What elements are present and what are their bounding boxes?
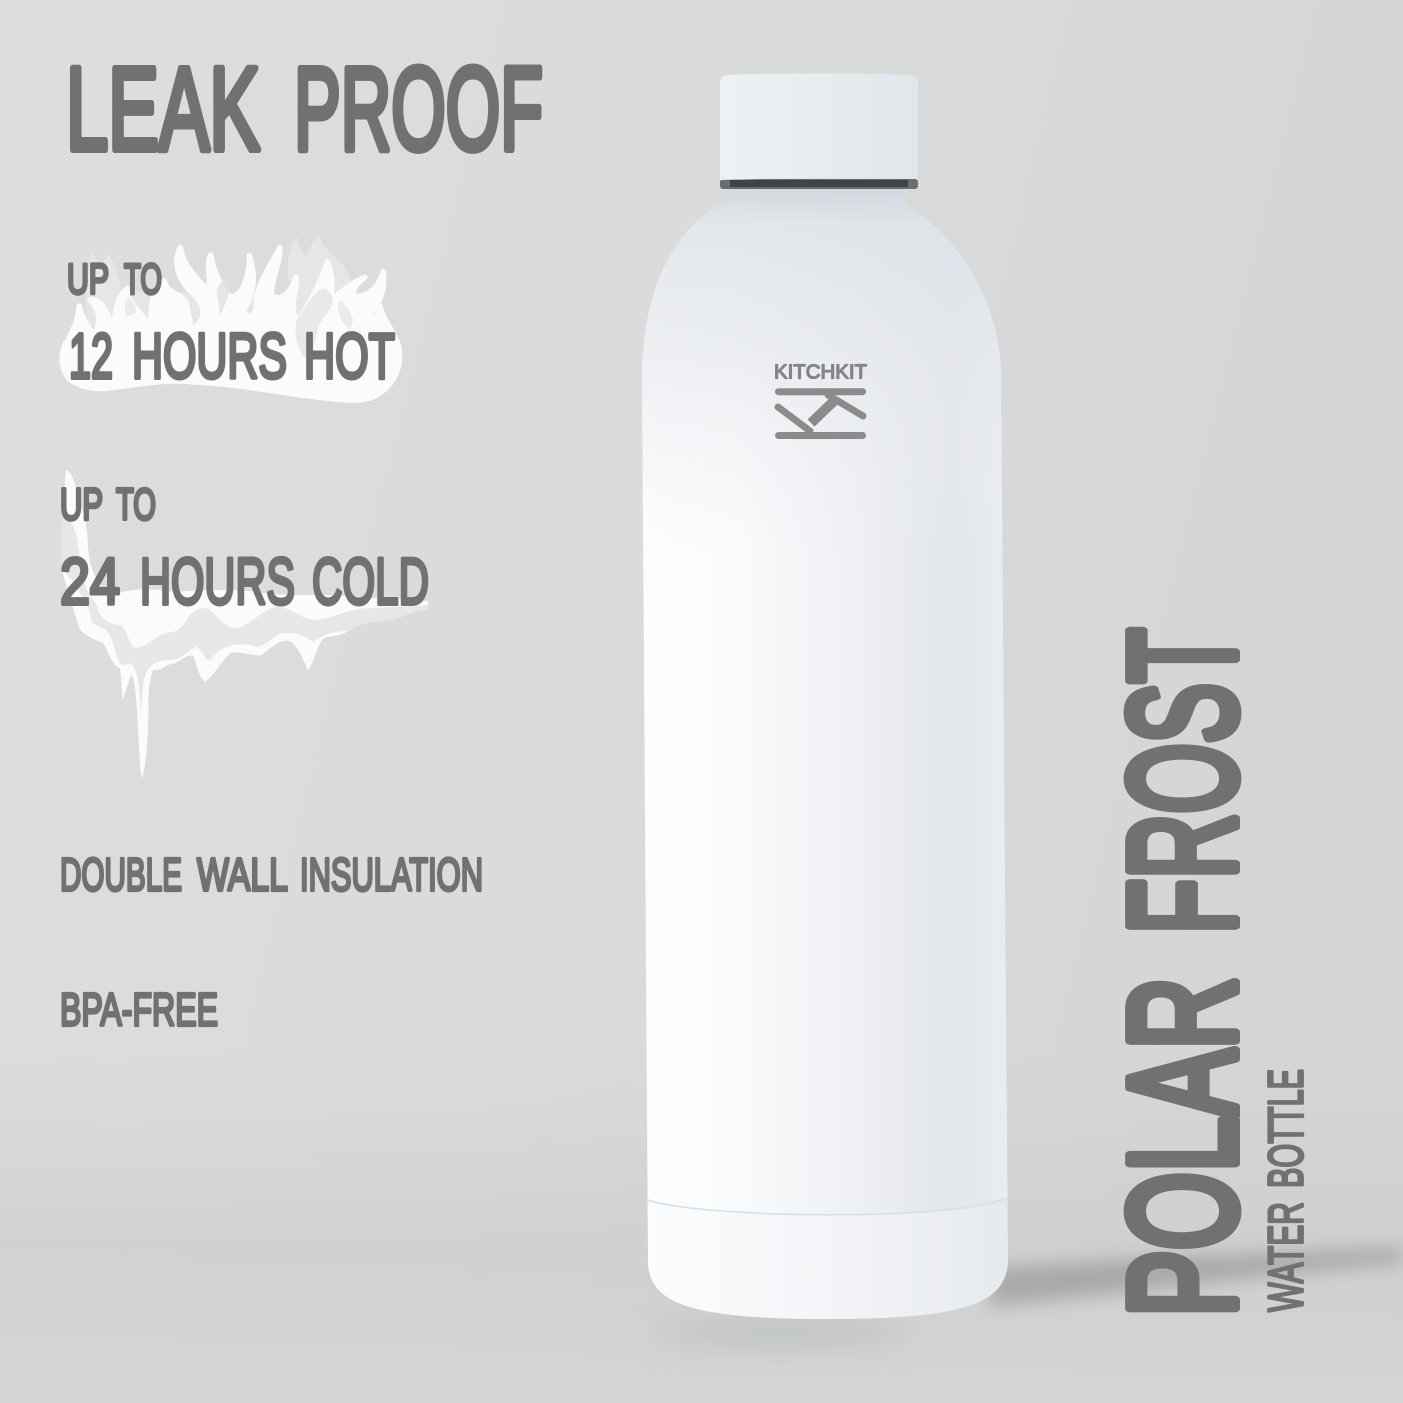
text: up to, cold: UP bbox=[60, 480, 103, 530]
bottle bbox=[642, 74, 1008, 1319]
text: 12 hours hot: HOT bbox=[304, 320, 395, 392]
text: double wall insulation: DOUBLE bbox=[60, 848, 182, 900]
icon: frost drip bbox=[61, 470, 428, 778]
text: up to, hot: TO bbox=[124, 256, 162, 304]
text: up to, hot bbox=[67, 256, 162, 304]
bottle body bbox=[642, 188, 1008, 1319]
text: 24 hours cold: COLD bbox=[312, 545, 429, 618]
text: double wall insulation bbox=[60, 848, 483, 900]
heading: leak proof bbox=[66, 44, 543, 176]
text: 12 hours hot: HOURS bbox=[132, 320, 287, 392]
title: polar frost: FROST bbox=[1098, 628, 1266, 934]
heading: leak proof: PROOF bbox=[294, 44, 543, 176]
bottle cap bbox=[720, 74, 918, 180]
text: up to, cold bbox=[60, 480, 156, 530]
subtitle: water bottle: WATER bbox=[1260, 1202, 1314, 1312]
text: 24 hours cold bbox=[60, 545, 429, 618]
icon: flames bbox=[62, 233, 400, 400]
logo: kitchkit bbox=[774, 360, 867, 436]
text: 12 hours hot: 12 bbox=[69, 320, 113, 392]
subtitle: water bottle: BOTTLE bbox=[1260, 1069, 1314, 1188]
text: bpa-free: BPA-FREE bbox=[60, 983, 218, 1035]
text: 24 hours cold: 24 bbox=[60, 545, 120, 618]
logo: kitchkit: KITCHKIT bbox=[774, 360, 867, 384]
icon: kk mark bbox=[778, 392, 863, 436]
heading: leak proof: LEAK bbox=[66, 44, 260, 176]
text: up to, hot: UP bbox=[67, 256, 109, 304]
text: 24 hours cold: HOURS bbox=[140, 545, 295, 618]
title: polar frost: POLAR bbox=[1098, 977, 1266, 1317]
text: double wall insulation: INSULATION bbox=[300, 848, 483, 900]
text: double wall insulation: WALL bbox=[197, 848, 288, 900]
text: up to, cold: TO bbox=[116, 480, 156, 530]
bottle seal ring bbox=[720, 179, 918, 189]
